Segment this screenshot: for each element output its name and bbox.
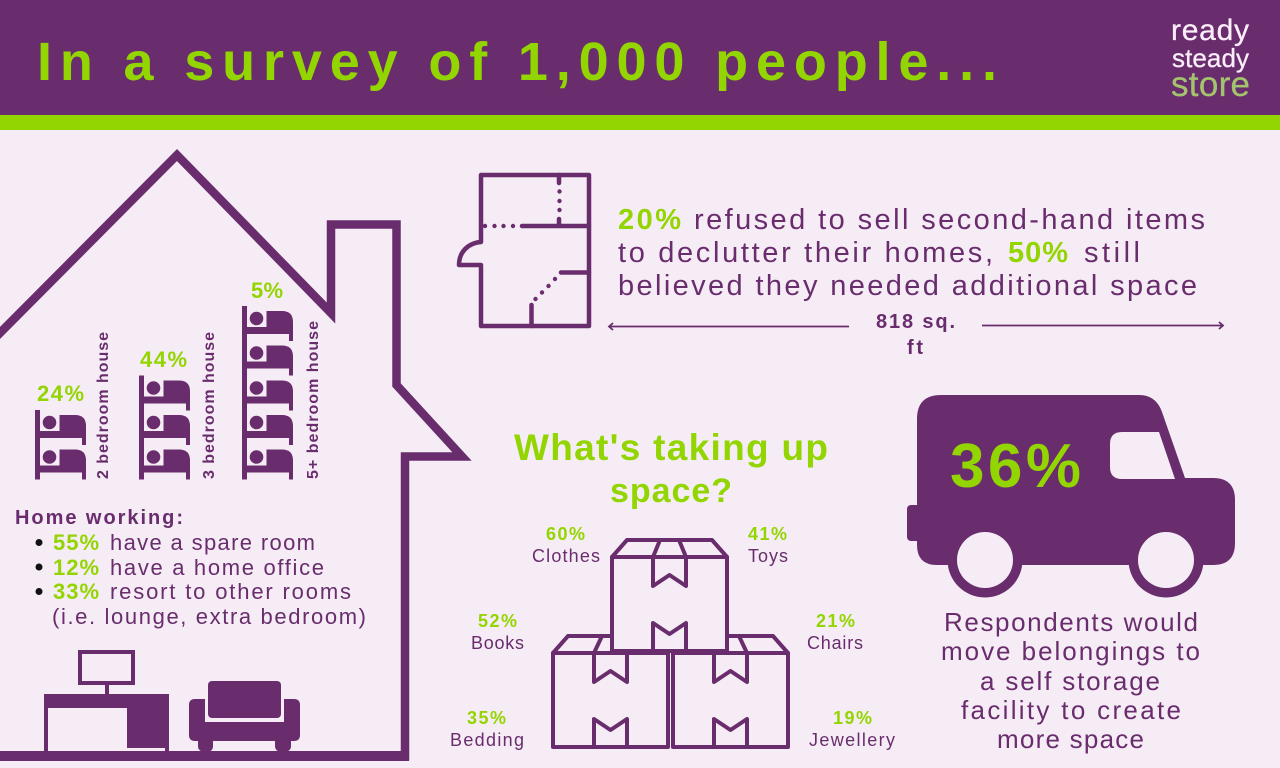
5+ bedroom house column: 5%	[251, 278, 283, 303]
3 bedroom house column	[139, 332, 218, 480]
decluttering statement: still	[1084, 237, 1140, 269]
logo: ready steady store	[1171, 14, 1250, 104]
icon: floor plan	[459, 175, 589, 326]
home working list: 12%	[53, 555, 99, 580]
home working list: 55%	[53, 530, 99, 555]
3 bedroom house column: 3 bedroom house	[201, 332, 218, 479]
home working list: have a spare room	[110, 530, 315, 555]
icon: van with 36%	[907, 395, 1235, 598]
bedroom chart	[35, 278, 322, 480]
heading: what's taking up space: What's taking up	[514, 427, 828, 468]
decluttering statement: 20%	[618, 204, 681, 236]
heading: what's taking up space	[514, 427, 828, 510]
logo: ready steady store: ready	[1171, 14, 1249, 47]
self storage statement: more space	[997, 724, 1144, 754]
self storage statement: facility to create	[961, 695, 1181, 725]
home working list: have a home office	[110, 555, 324, 580]
label: chairs: 21%	[816, 611, 855, 631]
home working list	[15, 507, 366, 629]
label: toys: Toys	[748, 546, 788, 566]
van percentage: 36%	[950, 432, 1081, 501]
2 bedroom house column: 24%	[37, 381, 84, 406]
label: clothes: 60%	[546, 524, 585, 544]
label: bedding	[450, 708, 524, 750]
home working list: 33%	[53, 579, 99, 604]
self storage statement: move belongings to	[941, 636, 1200, 666]
label: jewellery: Jewellery	[809, 730, 895, 750]
dimension arrows with 818 sq. ft label: 818 sq.	[876, 311, 955, 333]
title: In a survey of 1,000 people...	[37, 32, 997, 92]
heading: what's taking up space: space?	[610, 472, 732, 510]
5+ bedroom house column	[242, 278, 322, 480]
icon: stacked boxes	[553, 540, 788, 747]
logo: ready steady store: steady	[1172, 43, 1249, 73]
label: books: 52%	[478, 611, 517, 631]
home working list: (i.e. lounge, extra bedroom)	[52, 604, 366, 629]
decluttering statement: 50%	[1008, 237, 1068, 269]
3 bedroom house column: 44%	[140, 347, 187, 372]
label: toys: 41%	[748, 524, 787, 544]
label: chairs: Chairs	[807, 633, 863, 653]
decluttering statement	[618, 204, 1205, 302]
icon: armchair	[189, 681, 300, 752]
logo: ready steady store: store	[1171, 65, 1250, 104]
dimension arrows with 818 sq. ft label	[609, 311, 1223, 359]
home working list: Home working:	[15, 507, 183, 529]
label: books	[471, 611, 524, 653]
dimension arrows with 818 sq. ft label: ft	[907, 337, 923, 359]
house outline	[0, 155, 462, 756]
box labels	[450, 524, 895, 750]
label: jewellery	[809, 708, 895, 750]
self storage statement	[941, 607, 1200, 754]
label: clothes: Clothes	[532, 546, 600, 566]
label: chairs	[807, 611, 863, 653]
home working list: resort to other rooms	[110, 579, 351, 604]
label: books: Books	[471, 633, 524, 653]
decluttering statement: believed they needed additional space	[618, 270, 1197, 302]
2 bedroom house column	[35, 332, 112, 480]
label: bedding: Bedding	[450, 730, 524, 750]
label: bedding: 35%	[467, 708, 506, 728]
label: toys	[748, 524, 788, 566]
label: jewellery: 19%	[833, 708, 872, 728]
decluttering statement: refused to sell second-hand items	[694, 204, 1205, 236]
label: clothes	[532, 524, 600, 566]
self storage statement: a self storage	[980, 666, 1160, 696]
floor line	[0, 751, 409, 761]
decluttering statement: to declutter their homes,	[618, 237, 993, 269]
2 bedroom house column: 2 bedroom house	[95, 332, 112, 479]
icon: desk with monitor	[44, 652, 169, 752]
self storage statement: Respondents would	[944, 607, 1198, 637]
5+ bedroom house column: 5+ bedroom house	[305, 321, 322, 479]
header banner	[0, 0, 1280, 130]
